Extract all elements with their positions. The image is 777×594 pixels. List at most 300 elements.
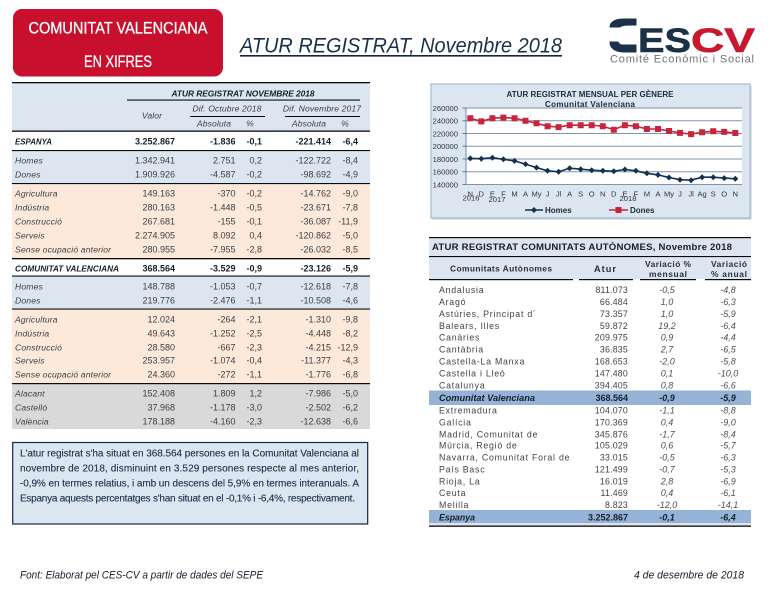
- row: València: [15, 416, 358, 426]
- row: Aragó: Aragó: [439, 297, 466, 307]
- x axis labels: A: [523, 190, 529, 198]
- row: Agricultura CV: -9,8: [342, 314, 358, 324]
- row: Comunitat Valenciana: [15, 264, 358, 274]
- regions table header: % anual: [711, 269, 747, 279]
- row: Indústria CV: -4.448: [305, 328, 331, 338]
- row: Astúries: [439, 309, 736, 319]
- row: Balears: -6,4: [720, 321, 736, 331]
- row: Castella-La Manxa: -5,8: [720, 356, 736, 366]
- row: Comunitat Valenciana: 368.564: [142, 264, 175, 274]
- table header: %: [246, 118, 254, 128]
- row: Andalusia: [439, 285, 736, 295]
- row: Galícia: 0,4: [661, 418, 673, 428]
- row: Aragó: -6,3: [720, 297, 736, 307]
- row: Construcció CV: -667: [217, 342, 236, 352]
- row: Catalunya: -6,6: [720, 380, 736, 390]
- row: País Basc: País Basc: [439, 464, 485, 474]
- row: Comunitat Valenciana: -3.529: [210, 264, 236, 274]
- x axis labels: N: [468, 190, 473, 198]
- row: Rioja: 2,8: [660, 476, 673, 486]
- row: Indústria: 280.163: [142, 202, 175, 212]
- row: Agricultura CV: Agricultura: [14, 314, 58, 324]
- row: Catalunya: Catalunya: [439, 380, 485, 390]
- row: Construcció CV: [15, 342, 358, 352]
- row: Múrcia: 105.029: [595, 440, 628, 450]
- row: València: València: [15, 416, 49, 426]
- row: Sense ocupació anterior: -8,5: [342, 244, 358, 254]
- row: Serveis: -5,0: [342, 230, 358, 240]
- red banner: COMUNITAT VALENCIANA: [28, 20, 208, 38]
- row: Sense ocupació anterior: -2,8: [246, 244, 262, 254]
- source note: Font: Elaborat pel CES-CV a partir de dades del SEPE: [20, 570, 264, 582]
- row: Homes CV: -1.053: [210, 282, 236, 292]
- row: Dones CV: [15, 296, 358, 306]
- row: Indústria CV: -1.252: [210, 328, 236, 338]
- row: Homes: Homes: [15, 156, 44, 166]
- panel: regions table: [429, 237, 751, 527]
- x axis labels: D: [479, 190, 485, 198]
- row: Espanya highlight: -6,4: [720, 512, 736, 522]
- row: Espanya: [15, 136, 358, 146]
- chart frame: [431, 84, 752, 220]
- row: Castelló: -6,2: [342, 402, 358, 412]
- date: 4 de desembre de 2018: [634, 570, 745, 582]
- row: Castella i Lleó: -10,0: [718, 368, 738, 378]
- row: Múrcia: -5,7: [720, 440, 737, 450]
- row: Navarra: 33.015: [600, 452, 628, 462]
- row: Astúries: 73.357: [600, 309, 628, 319]
- row: Múrcia: [439, 440, 737, 450]
- row: Espanya: -221.414: [295, 136, 331, 146]
- row: Sense ocupació anterior CV: -1,1: [246, 370, 262, 380]
- regions table title: [429, 237, 751, 279]
- row: Agricultura CV: 12.024: [147, 314, 175, 324]
- x axis labels: 2016: [463, 194, 479, 202]
- row: Alacant: -5,0: [342, 388, 358, 398]
- x axis labels: E: [622, 190, 627, 198]
- row: Alacant: Alacant: [14, 388, 45, 398]
- row: Dones CV: -4,6: [342, 296, 358, 306]
- row: Comunitat Valenciana highlight: Comunitat Valenciana: [439, 393, 535, 403]
- row: País Basc: 121.499: [595, 464, 628, 474]
- row: Castelló: [15, 402, 358, 412]
- row: Homes: -122.722: [295, 156, 331, 166]
- row: Catalunya: 394.405: [595, 380, 628, 390]
- legend: Homes: [545, 206, 572, 215]
- row: Indústria: Indústria: [15, 202, 49, 212]
- row: Espanya: 3.252.867: [135, 136, 175, 146]
- panel: line chart: [431, 84, 752, 220]
- row: Castella-La Manxa: 168.653: [595, 356, 628, 366]
- row: Alacant: -7.986: [305, 388, 331, 398]
- row: Sense ocupació anterior CV: -1.776: [305, 370, 331, 380]
- row: Castella i Lleó: [439, 368, 738, 378]
- row: Espanya highlight: [429, 510, 751, 527]
- row: Agricultura: -0,2: [246, 188, 262, 198]
- x axis labels: F: [634, 190, 639, 198]
- x axis labels: M: [511, 190, 518, 198]
- row: Indústria: -1.448: [210, 202, 236, 212]
- row: Agricultura: 149.163: [142, 188, 175, 198]
- row: Serveis CV: -4,3: [342, 356, 358, 366]
- row: Astúries: Astúries, Principat d´: [439, 309, 537, 319]
- row: Sense ocupació anterior CV: -272: [217, 370, 236, 380]
- x axis labels: My: [531, 190, 542, 198]
- row: Serveis CV: 253.957: [142, 356, 175, 366]
- row: Andalusia: -0,5: [659, 285, 676, 295]
- row: Construcció CV: -2,3: [246, 342, 262, 352]
- row: Andalusia: -4,8: [720, 285, 736, 295]
- row: Castelló: -2.502: [305, 402, 331, 412]
- y axis labels: 220000: [433, 130, 458, 138]
- summary text box: Espanya aquests percentatges s'han situat en el -0,1% i -6,4%, respectivament.: [20, 494, 355, 504]
- x axis labels: O: [589, 190, 595, 198]
- x axis labels: J: [678, 190, 682, 198]
- row: Construcció CV: 28.580: [147, 342, 175, 352]
- row: Melilla: [439, 500, 738, 510]
- row: Catalunya: [439, 380, 736, 390]
- table backgrounds: [12, 82, 370, 429]
- row: Comunitat Valenciana highlight: -5,9: [720, 393, 736, 403]
- x axis labels: A: [567, 190, 573, 198]
- x axis labels: S: [711, 190, 716, 198]
- logo: CES-CV: CV: [691, 22, 755, 60]
- row: Alacant: 1,2: [249, 388, 262, 398]
- row: Aragó: [439, 297, 736, 307]
- row: Rioja: -6,9: [720, 476, 736, 486]
- row: Ceuta: [439, 488, 736, 498]
- x axis labels: Ag: [697, 190, 707, 198]
- row: Extremadura: -8,8: [720, 406, 736, 416]
- row: Rioja: Rioja, La: [439, 476, 480, 486]
- x axis labels: D: [611, 190, 617, 198]
- row: Construcció CV: -12,9: [337, 342, 358, 352]
- y axis labels: 260000: [433, 104, 458, 113]
- row: Comunitat Valenciana: -5,9: [342, 264, 358, 274]
- row: Homes CV: -7,8: [342, 282, 358, 292]
- y axis labels: 200000: [433, 142, 458, 151]
- row: Madrid: -1,7: [659, 430, 676, 440]
- row: Ceuta: 0,4: [661, 488, 673, 498]
- row: València: -12.638: [300, 416, 331, 426]
- row: Serveis CV: Serveis: [15, 356, 45, 366]
- row: Castelló: Castelló: [15, 402, 47, 412]
- row: Construcció: -11,9: [338, 216, 358, 226]
- row: Dones: -0,2: [246, 170, 262, 180]
- row: Comunitat Valenciana: -23.126: [300, 264, 331, 274]
- chart title: Comunitat Valenciana: [545, 100, 636, 109]
- summary text box: [13, 442, 368, 524]
- table header: [142, 88, 362, 128]
- x axis labels: O: [721, 190, 727, 198]
- table header: Dif. Novembre 2017: [283, 104, 362, 114]
- row: Extremadura: [439, 406, 736, 416]
- row: Canàries: [439, 332, 736, 342]
- row: Astúries: -5,9: [720, 309, 736, 319]
- row: Construcció: -0,1: [246, 216, 262, 226]
- row: Castelló: 37.968: [147, 402, 175, 412]
- row: Comunitat Valenciana highlight: -0,9: [659, 393, 675, 403]
- row: Dones CV: -2.476: [210, 296, 236, 306]
- x axis labels: N: [733, 190, 738, 198]
- row: Aragó: 1,0: [661, 297, 673, 307]
- row: Agricultura CV: -2,1: [246, 314, 262, 324]
- row: Indústria CV: [15, 328, 358, 338]
- row: Serveis: -120.862: [295, 230, 331, 240]
- x axis labels: [463, 190, 738, 204]
- row: Homes CV: -0,7: [246, 282, 262, 292]
- row: Galícia: -9,0: [720, 418, 736, 428]
- row: Dones: -98.692: [300, 170, 331, 180]
- row: Aragó: 66.484: [600, 297, 628, 307]
- row: Astúries: 1,0: [661, 309, 673, 319]
- row: Agricultura: [14, 188, 358, 198]
- x axis labels: F: [501, 190, 506, 198]
- y axis labels: 240000: [433, 117, 458, 126]
- x axis labels: J: [546, 190, 550, 198]
- summary text box: novembre de 2018, disminuint en 3.529 persones respecte al mes anterior,: [20, 464, 359, 474]
- row: Ceuta: 11.469: [601, 488, 628, 498]
- row: Extremadura: -1,1: [659, 406, 675, 416]
- row: Agricultura CV: [14, 314, 358, 324]
- row: Homes: 2.751: [213, 156, 236, 166]
- x axis labels: Jl: [688, 190, 694, 198]
- row: Múrcia: Múrcia, Regió de: [439, 440, 518, 450]
- row: Alacant: 1.809: [213, 388, 236, 398]
- table header: %: [341, 118, 349, 128]
- row: Construcció: [15, 216, 358, 226]
- row: Indústria CV: -2,5: [246, 328, 262, 338]
- row: Serveis CV: -1.074: [210, 356, 236, 366]
- row: Galícia: 170.369: [595, 418, 628, 428]
- logo: CES-CV: ES: [638, 22, 691, 60]
- row: Construcció: 267.681: [142, 216, 175, 226]
- row: Rioja: 16.019: [600, 476, 628, 486]
- row: Construcció CV: -4.215: [305, 342, 331, 352]
- row: Comunitat Valenciana highlight: [429, 390, 751, 405]
- row: Indústria CV: 49.643: [147, 328, 175, 338]
- row: Serveis CV: -0,4: [246, 356, 262, 366]
- table header: Dif. Octubre 2018: [192, 104, 262, 114]
- regions table header: [429, 259, 751, 280]
- regions table header: Comunitats Autònomes: [450, 264, 552, 274]
- red banner: EN XIFRES: [84, 53, 152, 71]
- row: Indústria: -0,5: [246, 202, 262, 212]
- row: Homes: 0,2: [249, 156, 262, 166]
- row: Homes: 1.342.941: [135, 156, 175, 166]
- row: Sense ocupació anterior: [15, 244, 358, 254]
- row: Construcció: Construcció: [15, 216, 62, 226]
- row: Melilla: 8.823: [605, 500, 628, 510]
- regions table header: Variació %: [645, 259, 692, 269]
- y axis labels: 140000: [433, 180, 458, 190]
- row: Canàries: 209.975: [595, 332, 628, 342]
- row: Dones CV: -1,1: [246, 296, 262, 306]
- x axis labels: S: [578, 190, 583, 198]
- row: Serveis: 8.092: [213, 230, 236, 240]
- row: Madrid: Madrid, Comunitat de: [439, 430, 538, 440]
- row: Serveis CV: -11.377: [301, 356, 331, 366]
- regions table header: Variació: [711, 259, 747, 269]
- row: Extremadura: 104.070: [595, 406, 628, 416]
- row: Balears: Balears, Illes: [439, 321, 500, 331]
- row: València: 178.188: [142, 416, 175, 426]
- row: Espanya: -1.836: [210, 136, 236, 146]
- row: País Basc: [439, 464, 736, 474]
- row: València: -2,3: [246, 416, 262, 426]
- row: Agricultura CV: -264: [217, 314, 236, 324]
- row: Navarra: -6,3: [720, 452, 736, 462]
- row: Homes CV: -12.618: [300, 282, 331, 292]
- row: País Basc: -5,3: [720, 464, 736, 474]
- regions table header: mensual: [649, 269, 687, 279]
- row: Dones CV: 219.776: [142, 296, 175, 306]
- row: Sense ocupació anterior: Sense ocupació anterior: [15, 244, 112, 254]
- row: Castelló: -1.178: [210, 402, 236, 412]
- regions table title: ATUR REGISTRAT COMUNITATS AUTÒNOMES, Novembre 2018: [432, 241, 733, 253]
- row: Espanya highlight: 3.252.867: [588, 512, 628, 522]
- row: Cantàbria: 2,7: [660, 344, 674, 354]
- row: Balears: 59.872: [600, 321, 628, 331]
- row: Espanya: -0,1: [246, 136, 262, 146]
- row: Espanya: ESPANYA: [15, 136, 52, 146]
- y axis labels: 180000: [433, 155, 458, 164]
- legend: Dones: [630, 206, 655, 215]
- table header: Absoluta: [291, 118, 326, 128]
- row: Alacant: [14, 388, 358, 398]
- title: ATUR REGISTRAT, Novembre 2018: [238, 34, 562, 58]
- row: Serveis: 2.274.905: [135, 230, 175, 240]
- row: Cantàbria: 36.835: [600, 344, 628, 354]
- row: Sense ocupació anterior CV: Sense ocupació anterior: [15, 370, 112, 380]
- row: Castella-La Manxa: [439, 356, 736, 366]
- row: Melilla: Melilla: [439, 500, 469, 510]
- row: País Basc: -0,7: [659, 464, 676, 474]
- row: Canàries: 0,9: [661, 332, 673, 342]
- plot area: [462, 108, 742, 184]
- row: Galícia: [439, 418, 736, 428]
- y axis labels: 160000: [433, 168, 458, 177]
- x axis labels: M: [644, 190, 650, 198]
- row: Indústria: -23.671: [300, 202, 331, 212]
- row: Serveis: 0,4: [249, 230, 262, 240]
- row: Navarra: [439, 452, 736, 462]
- row: Serveis: Serveis: [15, 230, 45, 240]
- row: Castella i Lleó: Castella i Lleó: [439, 368, 506, 378]
- row: Madrid: -8,4: [720, 430, 736, 440]
- row: Sense ocupació anterior: -7.955: [210, 244, 236, 254]
- row: Agricultura: -14.762: [300, 188, 331, 198]
- row: Rioja: [439, 476, 736, 486]
- row: Navarra: Navarra, Comunitat Foral de: [439, 452, 570, 462]
- row: Sense ocupació anterior CV: [15, 370, 358, 380]
- row: Sense ocupació anterior CV: 24.360: [147, 370, 175, 380]
- row: Castella i Lleó: 147.480: [595, 368, 628, 378]
- x axis labels: Jl: [556, 190, 562, 198]
- row: Indústria: [15, 202, 358, 212]
- row: Dones: -4.587: [210, 170, 236, 180]
- row: Comunitat Valenciana highlight: 368.564: [595, 393, 628, 403]
- series: Dones: [467, 115, 738, 137]
- row: Indústria CV: Indústria: [15, 328, 49, 338]
- row: Balears: [439, 321, 736, 331]
- row: Dones: Dones: [15, 170, 41, 180]
- row: Canàries: Canàries: [439, 332, 480, 342]
- row: Castelló: -3,0: [246, 402, 262, 412]
- series: Homes: [467, 155, 738, 183]
- row: Navarra: -0,5: [659, 452, 676, 462]
- row: Andalusia: Andalusia: [439, 285, 484, 295]
- row: Ceuta: Ceuta: [439, 488, 466, 498]
- row: Madrid: 345.876: [595, 430, 628, 440]
- row: Espanya: -6,4: [342, 136, 358, 146]
- row: Agricultura: -370: [217, 188, 236, 198]
- row: Espanya highlight: Espanya: [439, 512, 475, 522]
- row: Espanya highlight: -0,1: [659, 512, 675, 522]
- regions table header: Atur: [594, 264, 616, 274]
- x axis labels: A: [655, 190, 661, 198]
- row: Serveis CV: [15, 356, 358, 366]
- panel: main table: [12, 82, 370, 429]
- row: Alacant: 152.408: [142, 388, 175, 398]
- row: Dones: 1.909.926: [135, 170, 175, 180]
- logo: CES-CV: Comité Econòmic i Social: [610, 54, 754, 66]
- row: Dones: -4,9: [342, 170, 358, 180]
- legend: [525, 206, 655, 215]
- row: Melilla: -12,0: [657, 500, 677, 510]
- row: Ceuta: -6,1: [720, 488, 736, 498]
- summary text box: L'atur registrat s'ha situat en 368.564 persones en la Comunitat Valenciana al: [20, 448, 359, 460]
- row: Comunitat Valenciana: -0,9: [246, 264, 262, 274]
- logo: CES-CV: [610, 19, 755, 66]
- chart title: [506, 90, 674, 109]
- row: Homes CV: Homes: [15, 282, 44, 292]
- x axis labels: 2018: [620, 194, 636, 203]
- row: Construcció CV: Construcció: [15, 342, 62, 352]
- row: Madrid: [439, 430, 736, 440]
- row: Cantàbria: -6,5: [720, 344, 737, 354]
- table header: Absoluta: [196, 118, 231, 128]
- row: Múrcia: 0,6: [661, 440, 673, 450]
- summary text box: -0,9% en termes relatius, i amb un descens del 5,9% en termes interanuals. A: [20, 478, 359, 490]
- row: Construcció: -36.087: [300, 216, 331, 226]
- row: Indústria: -7,8: [342, 202, 358, 212]
- y axis labels: [433, 104, 458, 190]
- row: Sense ocupació anterior CV: -6,8: [342, 370, 358, 380]
- row: Homes: -8,4: [342, 156, 358, 166]
- row: Canàries: -4,4: [720, 332, 736, 342]
- row: Andalusia: 811.073: [595, 285, 628, 295]
- row: València: -6,6: [342, 416, 358, 426]
- row: Dones CV: Dones: [15, 296, 41, 306]
- x axis labels: My: [664, 190, 674, 198]
- row: València: -4.160: [210, 416, 236, 426]
- row: Indústria CV: -8,2: [342, 328, 358, 338]
- row: Balears: 19,2: [658, 321, 676, 331]
- row: Construcció: -155: [217, 216, 236, 226]
- row: Serveis: [15, 230, 358, 240]
- row: Homes: [15, 156, 358, 166]
- row: Dones CV: -10.508: [300, 296, 331, 306]
- row: Cantàbria: [439, 344, 737, 354]
- row: Sense ocupació anterior: -26.032: [300, 244, 331, 254]
- row: Homes CV: [15, 282, 358, 292]
- red banner: [13, 9, 223, 76]
- row: Agricultura: -9,0: [342, 188, 358, 198]
- table header: Valor: [142, 110, 163, 120]
- row: Agricultura: Agricultura: [14, 188, 58, 198]
- row: Dones: [15, 170, 358, 180]
